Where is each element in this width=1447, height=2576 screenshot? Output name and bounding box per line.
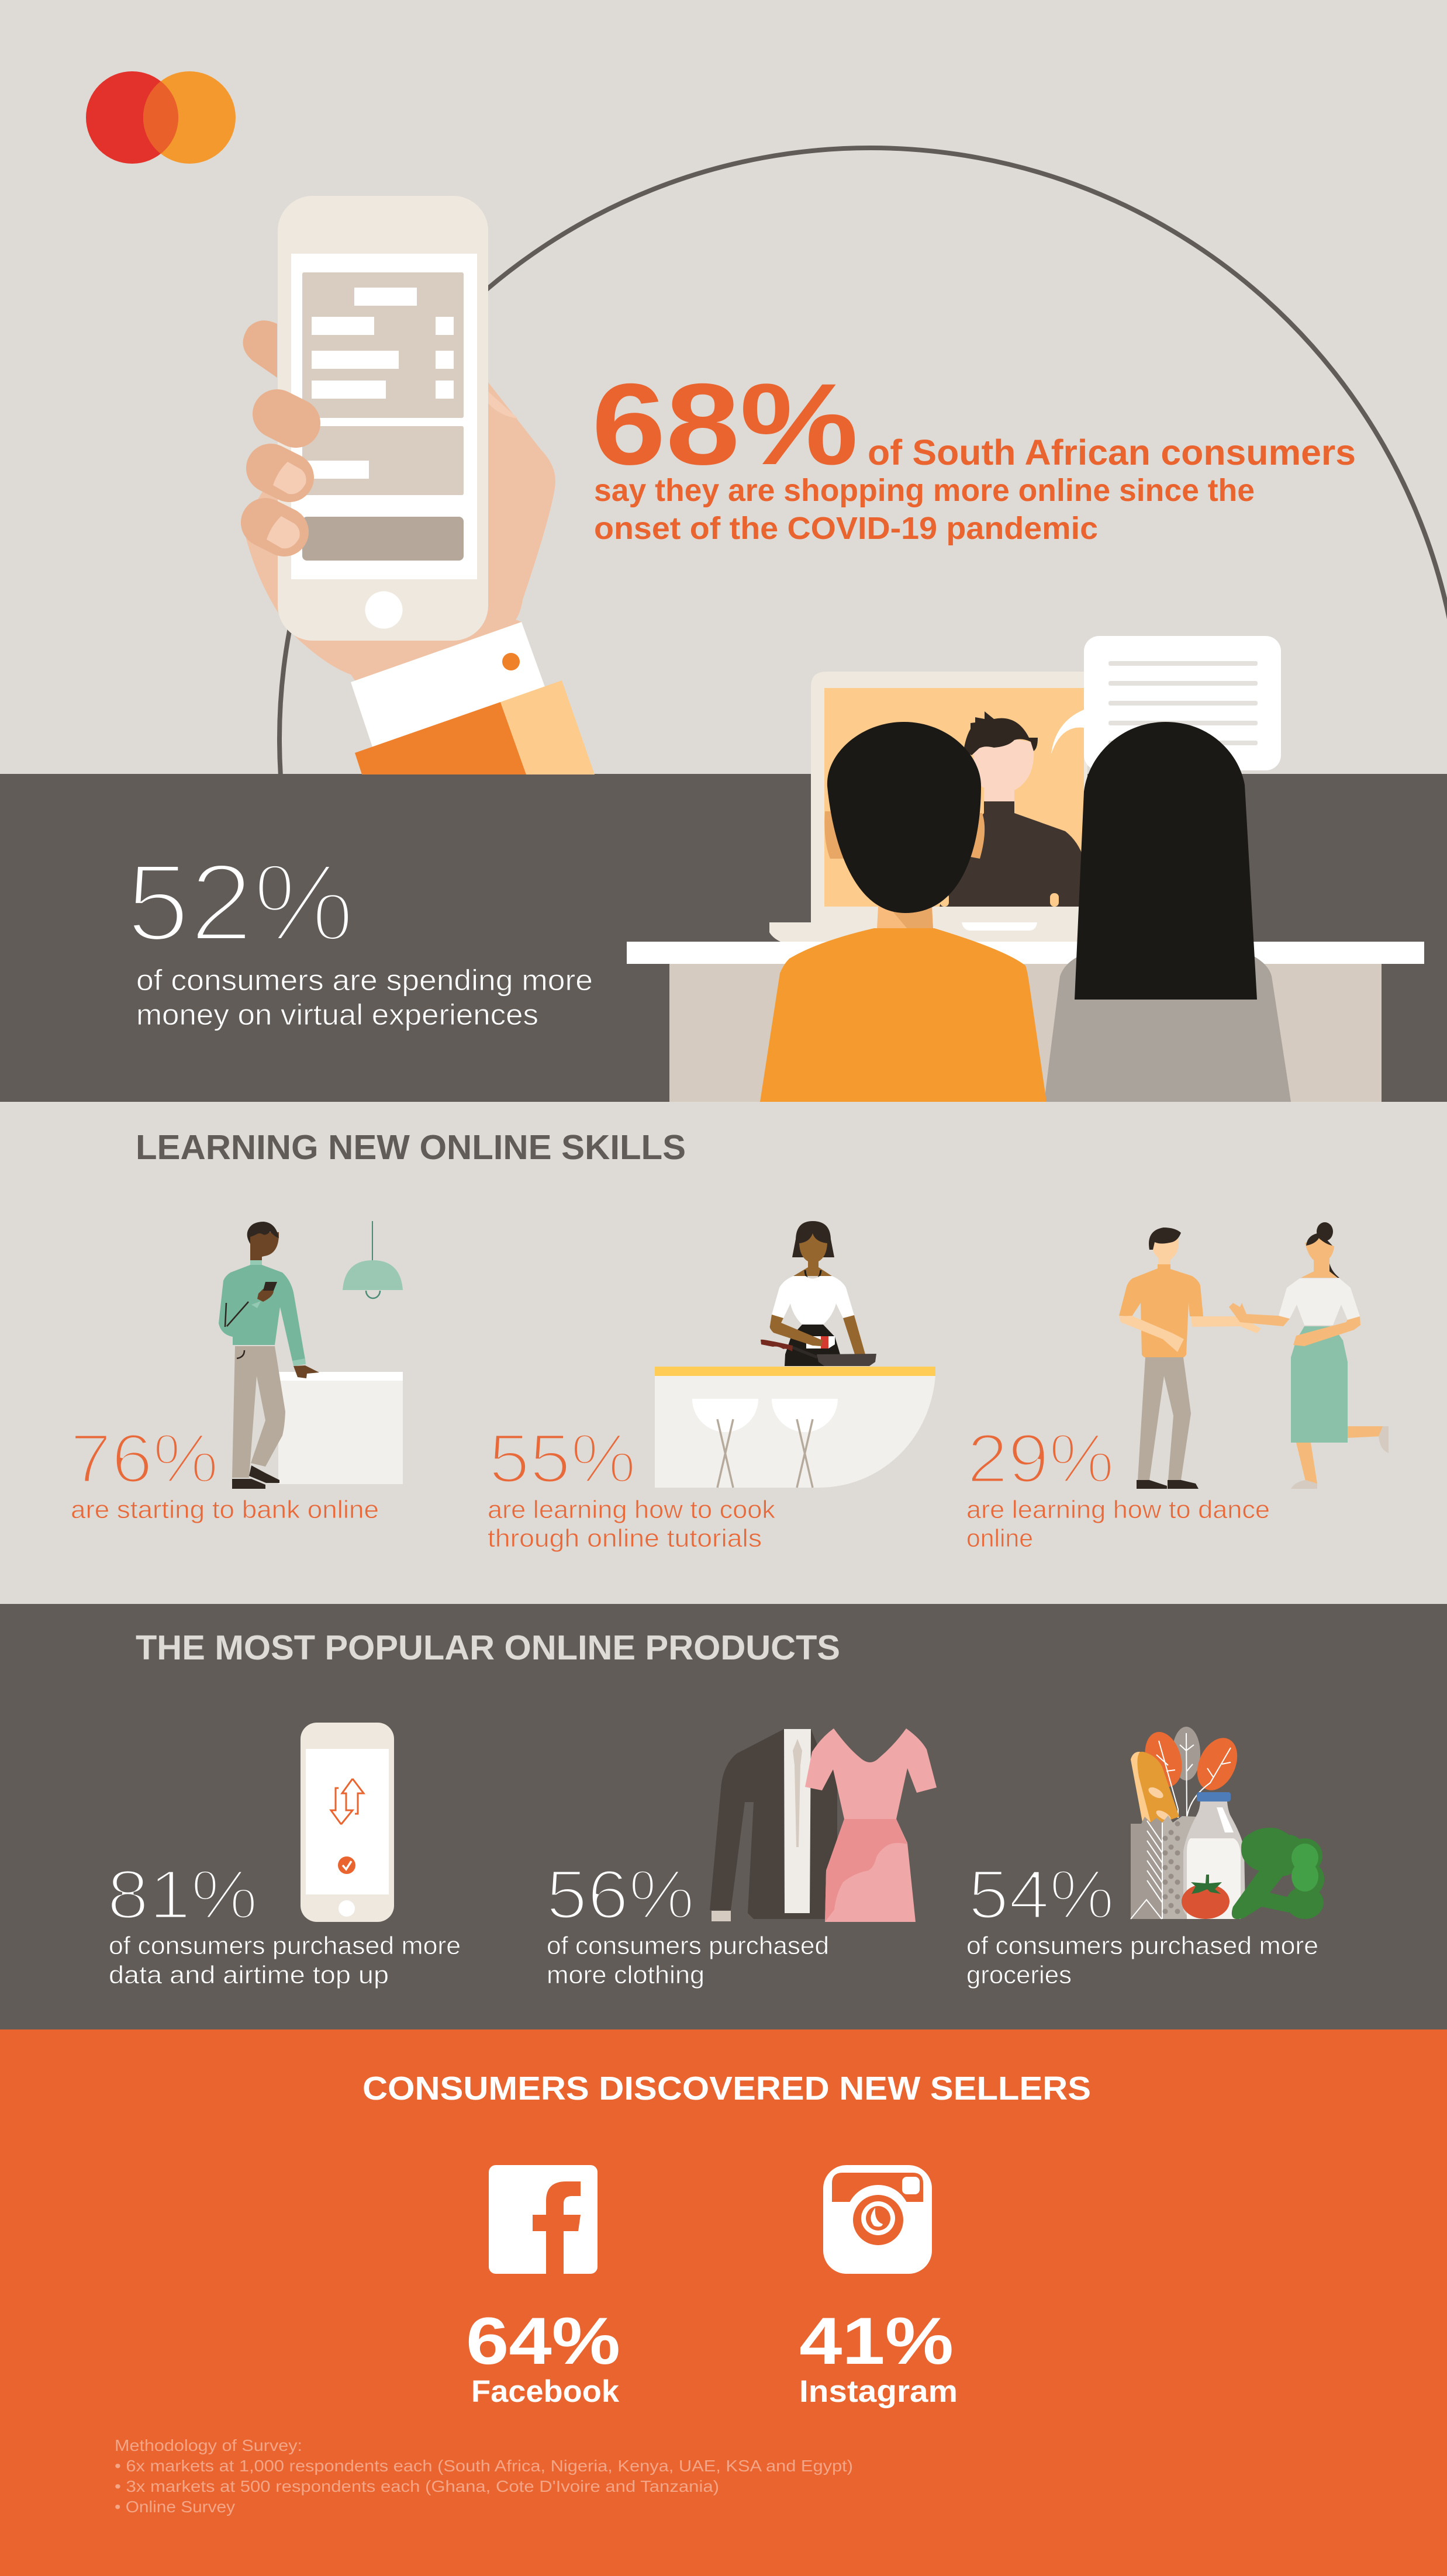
document card	[1084, 636, 1281, 770]
text: learning to cook line 1: are learning how to cook	[488, 1496, 776, 1524]
text: data and airtime line 2: data and airtime top up	[109, 1961, 389, 1989]
broccoli	[1232, 1828, 1324, 1919]
heading: most popular online products: THE MOST POPULAR ONLINE PRODUCTS	[136, 1628, 840, 1667]
bag	[1131, 1816, 1196, 1919]
rear finger	[243, 320, 277, 378]
illustration: couple dancing	[1119, 1222, 1389, 1489]
panel: popular online products band	[0, 1604, 1447, 2030]
illustration: couple watching laptop	[627, 636, 1424, 1102]
viewer right	[1044, 956, 1291, 1102]
fingers	[277, 414, 296, 423]
icon: facebook	[489, 2165, 598, 2274]
stat: 56%: 56%	[546, 1856, 695, 1934]
cuff	[351, 622, 545, 747]
stat: 52%: 52%	[126, 841, 354, 964]
viewer left	[877, 907, 933, 929]
sleeve	[355, 702, 526, 774]
text: clothing line 2: more clothing	[547, 1961, 704, 1989]
headline line 2: say they are shopping more online since the	[594, 473, 1255, 508]
stat: 64%: 64%	[466, 2304, 620, 2378]
headline line 1: of South African consumers	[868, 433, 1356, 472]
leaves	[1172, 1727, 1200, 1780]
text: methodology heading: Methodology of Survey:	[115, 2436, 302, 2454]
text: virtual experiences line 1: of consumers are spending more	[136, 964, 593, 997]
stat: 29%: 29%	[967, 1420, 1114, 1498]
text: learning to cook line 2: through online tutorials	[488, 1524, 762, 1552]
headline line 3: onset of the COVID-19 pandemic	[594, 511, 1098, 546]
phone body	[278, 196, 488, 641]
illustration: man with phone at counter	[219, 1221, 403, 1489]
laptop	[769, 672, 1087, 942]
text: virtual experiences line 2: money on virtual experiences	[136, 998, 538, 1031]
text: data and airtime line 1: of consumers purchased more	[109, 1932, 461, 1960]
baguette	[1131, 1752, 1179, 1823]
heading: learning new online skills: LEARNING NEW ONLINE SKILLS	[136, 1128, 686, 1167]
stat: 81%: 81%	[107, 1856, 258, 1934]
icon: hand holding phone	[243, 196, 595, 774]
icon: instagram	[823, 2165, 932, 2274]
man	[1158, 1257, 1170, 1265]
text: learning to dance line 1: are learning how to dance	[966, 1496, 1270, 1524]
text: groceries line 1: of consumers purchased more	[966, 1932, 1318, 1960]
text: methodology bullet 2: • 3x markets at 500 respondents each (Ghana, Cote D'Ivoire and Tanzania)	[115, 2477, 719, 2495]
tomato	[1182, 1884, 1230, 1919]
stat: 55%: 55%	[489, 1420, 636, 1498]
headline: 68%: 68%	[592, 359, 858, 489]
decorative arc	[277, 146, 1447, 774]
icon: phone with data transfer arrows	[301, 1723, 394, 1922]
woman	[1348, 1426, 1383, 1438]
chat tail	[1051, 710, 1084, 754]
hand palm	[243, 382, 555, 682]
text: learning to dance line 2: online	[966, 1524, 1033, 1552]
presenter on screen	[940, 813, 1084, 907]
heading: consumers discovered new sellers: CONSUMERS DISCOVERED NEW SELLERS	[362, 2070, 1091, 2107]
text: clothing line 1: of consumers purchased	[547, 1932, 829, 1960]
milk bottle	[1183, 1802, 1245, 1919]
panel: virtual experiences band	[0, 774, 1447, 1102]
icon: jacket and pink dress	[710, 1728, 937, 1922]
stat: 41%: 41%	[799, 2304, 954, 2378]
desk	[669, 964, 1382, 1102]
label: facebook: Facebook	[471, 2374, 620, 2409]
panel: new sellers band	[0, 2029, 1447, 2576]
text: groceries line 2: groceries	[966, 1961, 1072, 1989]
icon: grocery bag, milk, tomato, broccoli	[1131, 1727, 1324, 1919]
stat: 76%: 76%	[70, 1420, 219, 1498]
text: methodology bullet 1: • 6x markets at 1,000 respondents each (South Africa, Nigeria, Kenya, UAE, KSA and Egypt)	[115, 2457, 853, 2475]
stat: 54%: 54%	[968, 1856, 1114, 1934]
illustration: woman cooking at kitchen island	[655, 1221, 935, 1488]
text: methodology bullet 3: • Online Survey	[115, 2498, 235, 2516]
icon: brand logo circles	[86, 71, 236, 164]
label: instagram: Instagram	[799, 2374, 958, 2409]
text: starting to bank online: are starting to bank online	[71, 1496, 379, 1524]
